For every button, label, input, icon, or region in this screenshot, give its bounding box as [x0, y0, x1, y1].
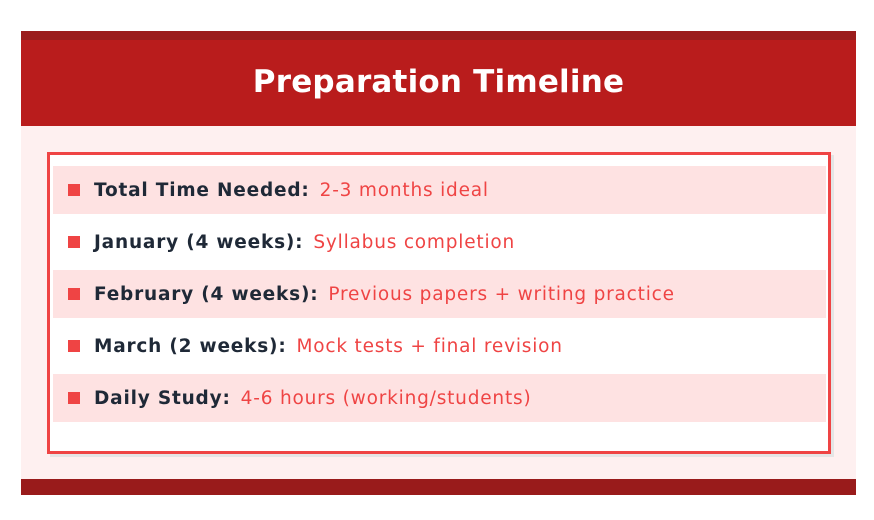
row: march: Mock tests + final revision — [297, 336, 563, 356]
row: january — [68, 232, 515, 252]
row: total time: Total Time Needed: — [94, 180, 310, 200]
row: march: March (2 weeks): — [94, 336, 287, 356]
bottom bar — [21, 479, 856, 495]
row: total time: 2-3 months ideal — [320, 180, 489, 200]
row: daily study — [53, 374, 826, 422]
row: february — [53, 270, 826, 318]
row: february: Previous papers + writing practice — [328, 284, 675, 304]
panel: timeline list — [47, 152, 831, 454]
row: january: January (4 weeks): — [94, 232, 303, 252]
row: january: Syllabus completion — [313, 232, 515, 252]
row: daily study: 4-6 hours (working/students) — [241, 388, 531, 408]
title: Preparation Timeline — [253, 64, 624, 100]
row: march — [68, 336, 563, 356]
row: daily study: Daily Study: — [94, 388, 231, 408]
row: total time — [53, 166, 826, 214]
header — [21, 31, 856, 126]
row: february: February (4 weeks): — [94, 284, 318, 304]
